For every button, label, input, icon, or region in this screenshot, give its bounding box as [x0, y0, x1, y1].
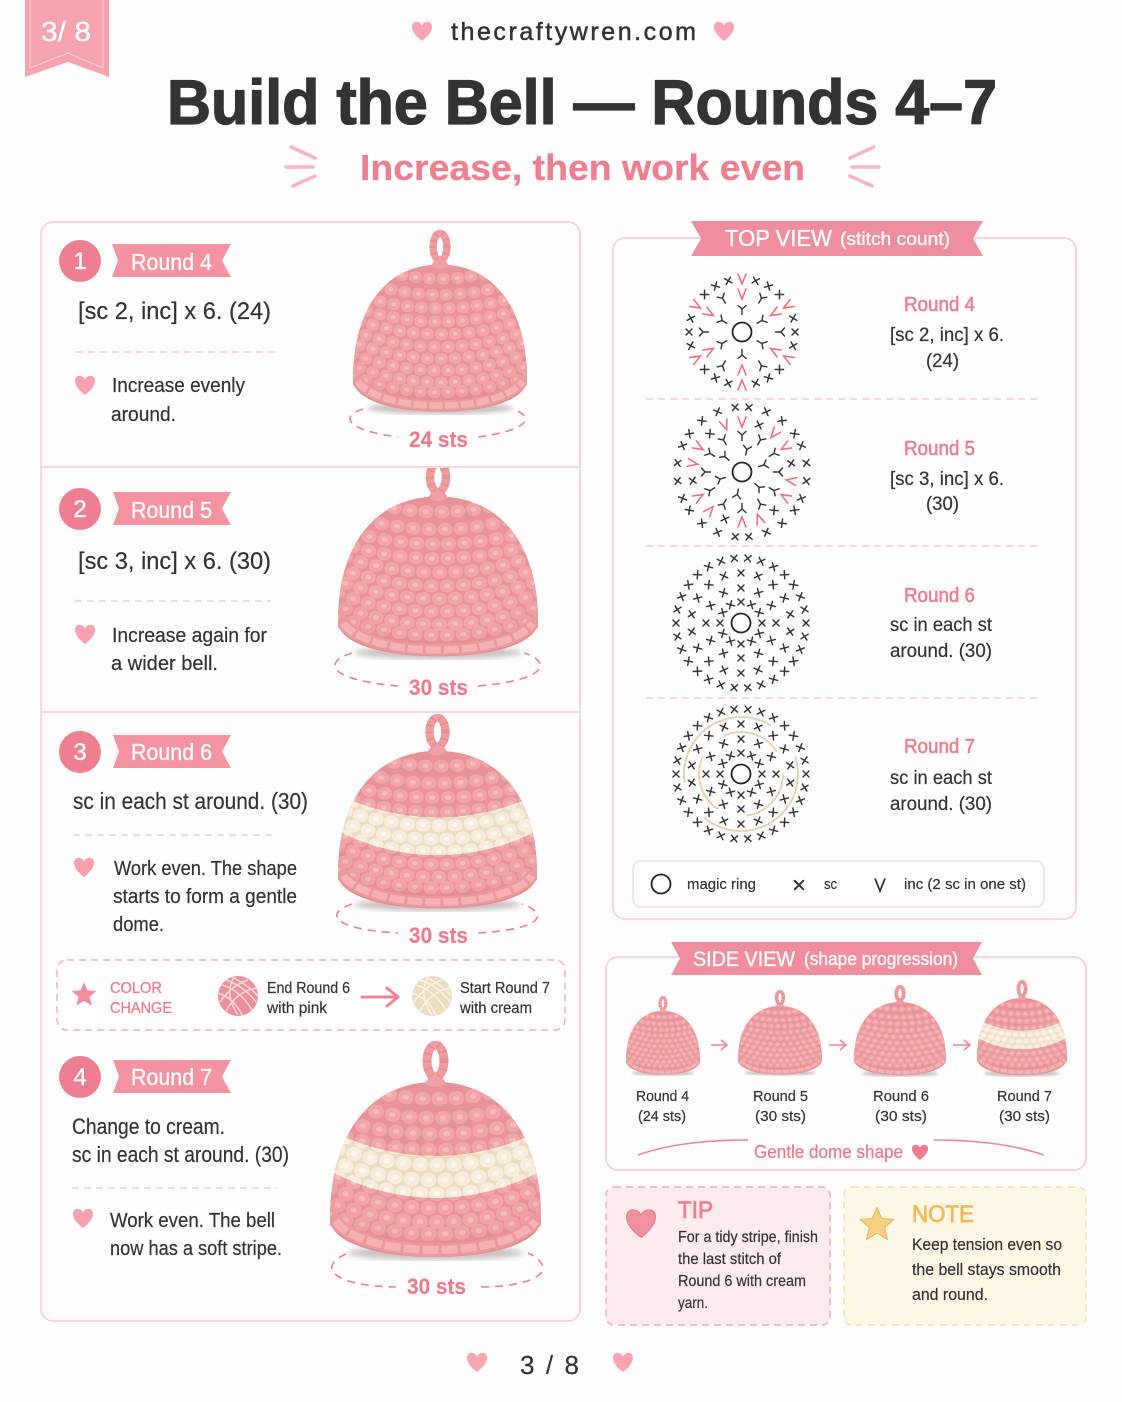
- instruction round 6: sc in each st around. (30): [73, 788, 308, 814]
- label round 4: Round 4: [636, 1088, 689, 1105]
- banner round 6: Round 6: [131, 739, 212, 765]
- tip text: yarn.: [678, 1295, 708, 1312]
- round 4 text: [sc 2, inc] x 6.: [890, 325, 1004, 346]
- label round 5: Round 5: [753, 1088, 808, 1105]
- gentle dome shape caption: [638, 1140, 1044, 1162]
- color change label: COLOR: [110, 980, 162, 997]
- tip box: [606, 1187, 830, 1325]
- icon: star: [860, 1207, 894, 1240]
- round 6 text: around. (30): [890, 641, 992, 662]
- banner: side view: SIDE VIEW: [693, 948, 795, 971]
- label round 5: (30 sts): [755, 1108, 806, 1125]
- start round 7 text: Start Round 7: [460, 980, 550, 997]
- end round 6 text: with pink: [266, 1000, 328, 1017]
- tip text: [678, 1229, 818, 1312]
- label round 6: (30 sts): [875, 1108, 927, 1125]
- note text: Keep tension even so: [912, 1235, 1062, 1254]
- note round 5: Increase again for: [112, 625, 267, 647]
- footer page number: [467, 1350, 633, 1380]
- banner round 4: Round 4: [131, 249, 212, 275]
- small bell round 6: [850, 987, 950, 1077]
- header site name with hearts: thecraftywren.com: [451, 18, 696, 46]
- note round 4: [75, 375, 245, 426]
- note round 5: [75, 625, 267, 675]
- label round 7: (30 sts): [999, 1108, 1050, 1125]
- stitch chart round 5: [655, 389, 829, 555]
- small bell round 4: [623, 997, 703, 1076]
- round 7 text: around. (30): [890, 794, 992, 815]
- bell photo round 7: [322, 1045, 549, 1260]
- legend: magic ring: [687, 876, 756, 893]
- banner round 6: [113, 735, 231, 768]
- banner: side view: [671, 942, 982, 975]
- number badge 2: 2: [73, 496, 87, 523]
- arrow: [953, 1040, 970, 1050]
- callout: color change: [57, 960, 565, 1030]
- end round 6 text: [266, 980, 350, 1017]
- bell photo round 6: [330, 718, 545, 911]
- round 4 text: (24): [926, 351, 959, 372]
- round 6 text: Round 6: [904, 585, 975, 607]
- panel: side view: [606, 942, 1086, 1170]
- banner: top view: [691, 221, 983, 256]
- note round 4: Increase evenly: [112, 375, 245, 397]
- note round 7: Work even. The bell: [110, 1210, 275, 1232]
- step 1: round 4: [59, 233, 534, 452]
- round 7 text: Round 7: [904, 736, 975, 758]
- banner: side view: (shape progression): [804, 949, 958, 969]
- subtitle with accent strokes: Increase, then work even: [360, 147, 805, 188]
- label round 6: Round 6: [873, 1088, 929, 1105]
- arrow: [711, 1040, 727, 1050]
- number badge 1: 1: [73, 248, 87, 275]
- instruction round 7: Change to cream.: [72, 1114, 225, 1139]
- icon: star: [72, 982, 96, 1006]
- note round 7: now has a soft stripe.: [110, 1238, 282, 1260]
- stitch chart round 7: [654, 691, 828, 857]
- note text: the bell stays smooth: [912, 1260, 1061, 1279]
- stitch count 30: 30 sts: [407, 1274, 466, 1299]
- stitch count 30: [335, 653, 540, 700]
- step 2: round 5: [59, 463, 546, 700]
- color change label: CHANGE: [110, 1000, 172, 1017]
- tip text: For a tidy stripe, finish: [678, 1229, 818, 1246]
- note round 6: starts to form a gentle: [113, 886, 297, 908]
- label round 7: [997, 1088, 1052, 1125]
- instruction round 7: [72, 1114, 289, 1167]
- banner: top view: (stitch count): [840, 229, 950, 249]
- label round 4: (24 sts): [638, 1108, 686, 1125]
- arrow: [829, 1040, 846, 1050]
- number badge 4: [59, 1056, 101, 1098]
- gentle dome shape caption: Gentle dome shape: [754, 1142, 903, 1162]
- corner ribbon: page 3 of 8: 3/ 8: [41, 16, 91, 47]
- end round 6 text: End Round 6: [267, 980, 350, 997]
- stitch chart round 6: [654, 540, 828, 706]
- arrow: pink to cream: [362, 988, 398, 1006]
- note text: [912, 1235, 1062, 1304]
- number badge 3: 3: [73, 739, 87, 766]
- number badge 4: 4: [73, 1064, 87, 1091]
- tip text: the last stitch of: [678, 1251, 782, 1268]
- banner: top view: TOP VIEW: [725, 225, 832, 251]
- step 4: round 7: [59, 1045, 549, 1299]
- tip text: Round 6 with cream: [678, 1273, 806, 1290]
- round 5 text: (30): [926, 494, 959, 515]
- tip heading: TIP: [678, 1197, 713, 1224]
- step 3: round 6: [59, 718, 545, 948]
- footer page number: 3 / 8: [520, 1350, 579, 1380]
- number badge 1: [59, 240, 101, 282]
- stitch count 30: [337, 904, 537, 948]
- note text: and round.: [912, 1285, 988, 1304]
- round 5 text: [sc 3, inc] x 6.: [890, 469, 1004, 490]
- round 6 text: [890, 585, 993, 662]
- corner ribbon: page 3 of 8: [25, 0, 109, 77]
- note round 5: a wider bell.: [111, 653, 218, 675]
- banner round 7: Round 7: [131, 1064, 212, 1090]
- round 4 text: [890, 294, 1004, 372]
- bell photo round 4: [346, 233, 534, 414]
- stitch count 24: [350, 409, 525, 452]
- bell photo round 5: [330, 463, 546, 659]
- start round 7 text: with cream: [459, 1000, 532, 1017]
- stitch count 30: 30 sts: [409, 923, 468, 948]
- banner round 4: [112, 244, 231, 277]
- icon: heart: [626, 1210, 656, 1238]
- icon: cream yarn ball: [412, 976, 452, 1016]
- legend: [633, 861, 1044, 907]
- panel: rounds 4 to 7 steps: [41, 222, 580, 1321]
- instruction round 7: sc in each st around. (30): [72, 1142, 289, 1167]
- banner round 7: [113, 1060, 231, 1093]
- note round 6: Work even. The shape: [114, 858, 297, 880]
- note round 7: [73, 1209, 282, 1260]
- small bell round 7: [973, 982, 1071, 1077]
- small bell round 5: [735, 992, 825, 1076]
- label round 5: [753, 1088, 808, 1125]
- round 5 text: Round 5: [904, 438, 975, 460]
- stitch count 30: 30 sts: [409, 675, 468, 700]
- round 7 text: sc in each st: [890, 768, 993, 789]
- note round 4: around.: [111, 404, 176, 426]
- note box: [844, 1187, 1086, 1325]
- legend: sc: [824, 876, 837, 893]
- banner round 5: Round 5: [131, 497, 212, 523]
- note round 6: dome.: [113, 914, 164, 936]
- round 7 text: [890, 736, 993, 815]
- color change label: [110, 980, 172, 1017]
- note round 6: [74, 858, 297, 936]
- panel: top view: [613, 221, 1076, 919]
- banner round 5: [113, 492, 231, 525]
- note heading: NOTE: [912, 1201, 974, 1228]
- start round 7 text: [459, 980, 550, 1017]
- label round 7: Round 7: [997, 1088, 1052, 1105]
- round 6 text: sc in each st: [890, 615, 993, 636]
- instruction round 5: [sc 3, inc] x 6. (30): [78, 548, 271, 575]
- stitch count 24: 24 sts: [409, 427, 468, 452]
- number badge 2: [59, 488, 101, 530]
- title: Build the Bell — Rounds 4–7: [167, 68, 997, 138]
- icon: pink yarn ball: [218, 976, 258, 1016]
- stitch count 30: [332, 1253, 543, 1299]
- label round 6: [873, 1088, 929, 1125]
- instruction round 4: [sc 2, inc] x 6. (24): [78, 298, 271, 325]
- round 4 text: Round 4: [904, 294, 975, 316]
- legend: inc (2 sc in one st): [904, 876, 1026, 893]
- round 5 text: [890, 438, 1004, 515]
- number badge 3: [59, 731, 101, 773]
- stitch chart round 4: [671, 267, 813, 397]
- label round 4: [636, 1088, 689, 1125]
